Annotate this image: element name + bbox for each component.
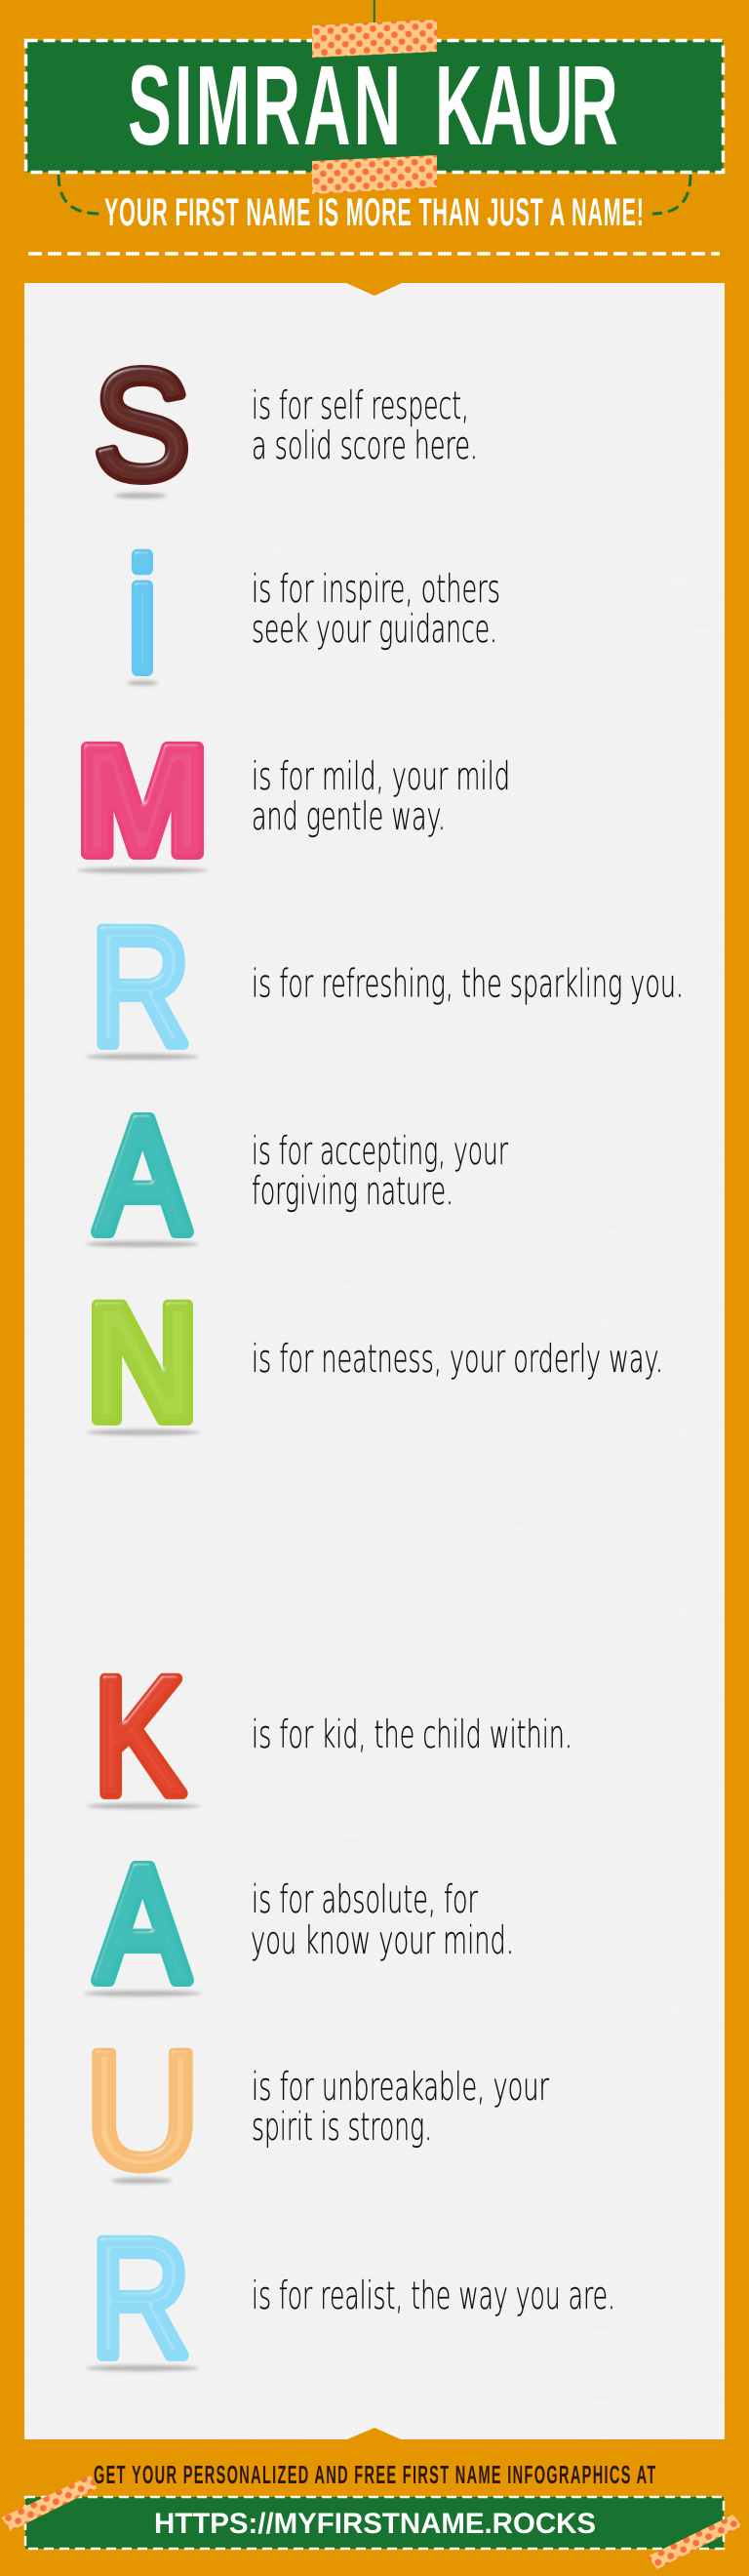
text: A second <box>251 1878 514 1963</box>
icon: letter R: R <box>91 895 190 1080</box>
row: M <box>77 714 510 886</box>
header <box>25 0 724 234</box>
row: I <box>127 528 500 704</box>
connector right <box>652 175 690 214</box>
icon: letter N: N <box>87 1269 198 1455</box>
text: A second: you know your mind. <box>251 1919 514 1963</box>
row: N <box>87 1269 663 1455</box>
icon: letter R second: R <box>91 2206 190 2392</box>
row: A <box>86 1084 508 1268</box>
footer url: HTTPS://MYFIRSTNAME.ROCKS <box>154 2508 596 2540</box>
panel: letters <box>24 283 725 2439</box>
icon: letter i: i <box>128 528 157 704</box>
tape: footer right <box>648 2515 741 2569</box>
text: U: spirit is strong. <box>252 2106 432 2150</box>
icon: letter A: A <box>96 1084 189 1268</box>
text: U: is for unbreakable, your <box>252 2066 549 2110</box>
footer banner <box>25 2497 724 2549</box>
row: S <box>94 339 478 511</box>
text: I: is for inspire, others <box>252 568 500 612</box>
title: KAUR <box>435 43 618 170</box>
subtitle: YOUR FIRST NAME IS MORE THAN JUST A NAME! <box>104 190 644 234</box>
title: SIMRAN <box>128 43 401 170</box>
row: R <box>86 895 684 1080</box>
icon: letter M: M <box>77 714 208 886</box>
text: A <box>252 1130 508 1214</box>
icon: letter U: U <box>84 2017 201 2203</box>
row: A second <box>84 1832 514 2016</box>
text: A: is for accepting, your <box>252 1130 508 1174</box>
title banner <box>25 41 724 172</box>
text: A: forgiving nature. <box>252 1170 453 1214</box>
row: U <box>84 2017 549 2203</box>
text: S <box>252 384 478 468</box>
icon: letter A second: A <box>96 1832 189 2016</box>
text: I: seek your guidance. <box>252 608 497 652</box>
text: M: and gentle way. <box>252 795 446 839</box>
row: K <box>87 1643 572 1830</box>
icon: letter K: K <box>94 1643 184 1830</box>
connector left <box>59 175 100 214</box>
icon: letter S: S <box>94 339 190 511</box>
row: R second <box>86 2206 615 2392</box>
text: M: is for mild, your mild <box>252 755 510 799</box>
text: A second: is for absolute, for <box>252 1878 478 1922</box>
text: I <box>252 568 500 652</box>
tape: footer left <box>2 2475 98 2531</box>
text: M <box>252 755 510 839</box>
text: K: is for kid, the child within. <box>252 1713 572 1757</box>
footer caption: GET YOUR PERSONALIZED AND FREE FIRST NAME INFOGRAPHICS AT <box>94 2462 655 2489</box>
tape: top <box>312 20 437 58</box>
tape: bottom <box>312 155 437 194</box>
footer <box>2 2462 741 2569</box>
text: S: a solid score here. <box>252 424 478 468</box>
text: S: is for self respect, <box>252 384 469 428</box>
text: U <box>252 2066 549 2150</box>
